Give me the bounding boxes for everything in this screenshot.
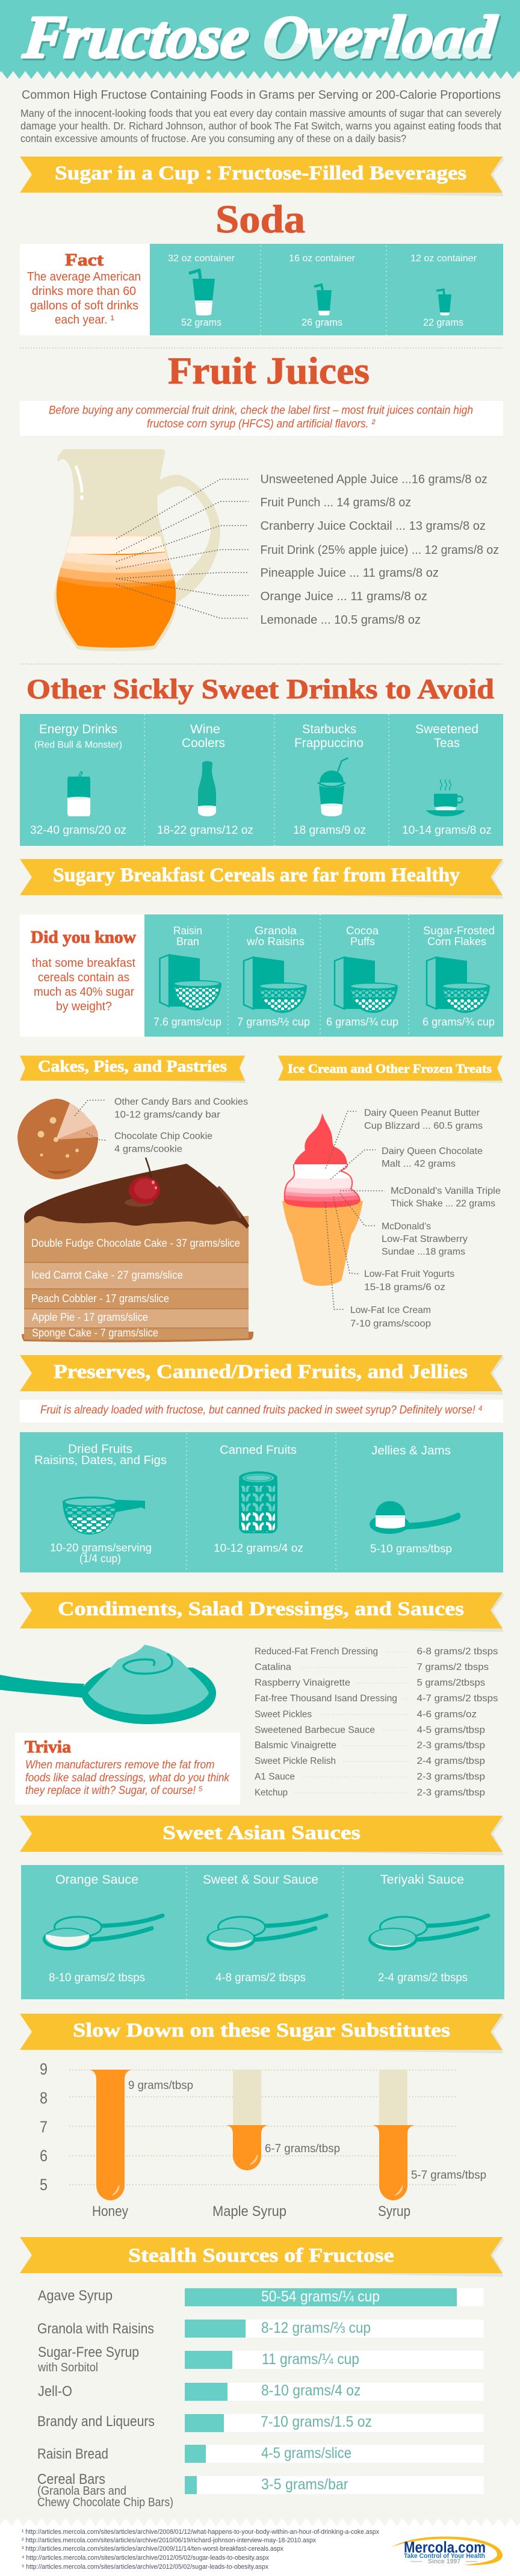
leader lines: juices [116, 479, 249, 618]
tube: maple syrup: Maple Syrup [212, 2203, 286, 2220]
cookie labels: Chocolate Chip Cookie [114, 1131, 212, 1141]
tube: syrup: 5-7 grams/tbsp [411, 2169, 486, 2182]
cereal column: raisin bran: Raisin [173, 925, 202, 937]
tube: honey: 9 grams/tbsp [128, 2079, 193, 2092]
fact callout: gallons of soft drinks [30, 299, 138, 312]
wine coolers column [157, 722, 253, 837]
ice cream labels: Cup Blizzard ... 60.5 grams [364, 1121, 483, 1131]
cookie labels: Other Candy Bars and Cookies [114, 1097, 248, 1107]
cereal column: frosted flakes [422, 925, 495, 1028]
bar: sugar-free syrup: Sugar-Free Syrup [38, 2344, 139, 2360]
subtitle: Common High Fructose Containing Foods in Grams per Serving or 200-Calorie Proportions [22, 88, 501, 102]
fact callout [27, 250, 141, 326]
cereal column: frosted flakes: Sugar-Frosted [423, 925, 495, 937]
fact callout: each year. ¹ [55, 313, 114, 326]
banner: sugar substitutes: Slow Down on these Sugar Substitutes [73, 2020, 450, 2041]
fact callout: drinks more than 60 [32, 285, 136, 298]
banner: sugar in a cup [20, 157, 504, 196]
bar: granola [37, 2320, 484, 2338]
bar: cereal bars: (Granola Bars and [37, 2484, 126, 2498]
references: ³ http://articles.mercola.com/sites/articles/archive/2009/11/14/ten-worst-breakfast-cereals.aspx [22, 2545, 283, 2553]
icon: big spoon with dressing [0, 1645, 216, 1724]
bar: raisin bread: 4-5 grams/slice [261, 2445, 351, 2462]
intro paragraph: contain excessive amounts of fructose. Are you consuming any of these on a daily basis? [20, 132, 406, 144]
bar: jell-o: Jell-O [38, 2383, 72, 2400]
cherry [125, 1158, 160, 1206]
banner: ice cream [278, 1056, 503, 1083]
cereal column: granola: Granola [255, 925, 297, 937]
ice cream labels: Dairy Queen Peanut Butter [364, 1108, 480, 1119]
juice list: Orange Juice ... 11 grams/8 oz [260, 590, 427, 603]
fact callout: The average American [27, 270, 141, 284]
title: Fructose Overload [20, 4, 500, 70]
top swirl [294, 1113, 347, 1165]
jellies and jams column: Jellies & Jams [371, 1444, 451, 1457]
intro paragraph [20, 107, 501, 144]
plate [22, 1332, 253, 1342]
cake labels: Iced Carrot Cake - 27 grams/slice [31, 1269, 183, 1281]
condiments table: 6-8 grams/2 tbsps [416, 1646, 498, 1657]
did you know callout [31, 928, 136, 1013]
ice cream labels: Dairy Queen Chocolate [382, 1146, 483, 1156]
condiments table: 4-5 grams/tbsp [416, 1725, 485, 1736]
cake layers [24, 1216, 249, 1340]
juice list: Pineapple Juice ... 11 grams/8 oz [260, 566, 439, 580]
sweetened teas column: Teas [434, 736, 460, 750]
did you know callout: Did you know [31, 928, 136, 947]
frappuccino column [293, 722, 366, 837]
bar: brandy: 7-10 grams/1.5 oz [261, 2413, 372, 2430]
cake labels: Sponge Cake - 7 grams/slice [32, 1327, 158, 1339]
soda column 32 oz [168, 253, 235, 328]
references: ⁴ http://articles.mercola.com/sites/articles/archive/2012/05/02/sugar-leads-to-obesity.aspx [22, 2554, 269, 2562]
condiments table: Balsmic Vinaigrette [255, 1740, 336, 1751]
bar: cereal bars: 3-5 grams/bar [261, 2476, 348, 2493]
panel: asian sauces [21, 1865, 504, 1999]
frappuccino column: Starbucks [302, 722, 356, 736]
tube: maple syrup [212, 2070, 340, 2220]
bar: agave: Agave Syrup [38, 2288, 113, 2304]
title: Fructose Overload [22, 5, 501, 72]
logo: mercola: Since 1997 [428, 2558, 460, 2565]
condiments table: 2-3 grams/tbsp [416, 1788, 485, 1798]
logo: mercola: Mercola.com [404, 2538, 486, 2556]
banner: cereals [20, 859, 504, 899]
jellies and jams column [370, 1444, 460, 1554]
dried fruits column: 10-20 grams/serving [50, 1542, 152, 1554]
juice list: Cranberry Juice Cocktail ... 13 grams/8 oz [260, 520, 486, 533]
condiments table: Reduced-Fat French Dressing [255, 1646, 378, 1657]
trivia callout: Trivia [25, 1737, 72, 1757]
bar: agave [38, 2288, 484, 2306]
references: ² http://articles.mercola.com/sites/articles/archive/2010/06/19/richard-johnson-interview-may-18-2010.aspx [22, 2537, 316, 2544]
banner: asian sauces [20, 1816, 504, 1855]
did you know callout: cereals contain as [38, 971, 129, 984]
banner: cereals: Sugary Breakfast Cereals are far from Healthy [53, 864, 460, 886]
juice list: Fruit Punch ... 14 grams/8 oz [260, 496, 411, 509]
footer band [0, 2518, 520, 2576]
condiments table: 2-3 grams/tbsp [416, 1740, 485, 1751]
energy drinks column [30, 722, 126, 837]
cereal column: cocoa puffs [326, 925, 398, 1028]
banner: stealth sources: Stealth Sources of Fructose [128, 2245, 394, 2267]
juice layers [54, 536, 181, 651]
bar chart: stealth sources [37, 2288, 484, 2509]
soda column 16 oz: 16 oz container [289, 253, 356, 264]
banner: cakes: Cakes, Pies, and Pastries [38, 1057, 227, 1075]
ice cream labels [350, 1108, 501, 1329]
ice cream labels: Malt ... 42 grams [382, 1159, 456, 1169]
axis labels: 5 [40, 2176, 48, 2194]
jellies and jams column: 5-10 grams/tbsp [370, 1542, 452, 1554]
callout: canned fruit [20, 1400, 503, 1423]
bar: cereal bars: Cereal Bars [37, 2471, 105, 2488]
juice list [260, 473, 499, 627]
cake labels [31, 1237, 240, 1339]
orange sauce column [43, 1873, 162, 1984]
soda column 12 oz [410, 253, 477, 328]
cereal column: granola: 7 grams/½ cup [237, 1016, 310, 1028]
bar: jell-o [38, 2382, 484, 2401]
bar: jell-o: 8-10 grams/4 oz [261, 2382, 361, 2399]
bar: sugar-free syrup: 11 grams/¼ cup [262, 2351, 359, 2368]
leader lines: cookie [75, 1100, 106, 1140]
energy drinks column: 32-40 grams/20 oz [30, 824, 126, 837]
cereal column: raisin bran [153, 925, 221, 1028]
panel: cereals [20, 914, 503, 1037]
banner: stealth sources [20, 2237, 504, 2277]
heading: fruit juices: Fruit Juices [168, 349, 370, 392]
bar: sugar-free syrup: with Sorbitol [37, 2361, 98, 2374]
soda column 16 oz: 26 grams [302, 317, 342, 328]
canned fruits column [214, 1444, 303, 1554]
cake illustration [22, 1158, 253, 1342]
pitcher illustration [54, 449, 220, 651]
intro paragraph: damage your health. Dr. Richard Johnson, author of book The Fat Switch, warns you against eating foods that [20, 120, 501, 132]
cereal column: raisin bran: 7.6 grams/cup [153, 1016, 221, 1028]
ice cream labels: Thick Shake ... 22 grams [391, 1199, 495, 1209]
cookie labels: 10-12 grams/candy bar [114, 1110, 220, 1120]
juice list: Unsweetened Apple Juice ...16 grams/8 oz [260, 473, 488, 486]
heading: soda: Soda [215, 197, 305, 241]
orange sauce column: 8-10 grams/2 tbsps [49, 1972, 145, 1984]
cake labels: Peach Cobbler - 17 grams/slice [31, 1293, 169, 1305]
ice cream labels: Low-Fat Strawberry [382, 1234, 468, 1244]
ice cream labels: Low-Fat Ice Cream [350, 1305, 431, 1315]
banner: asian sauces: Sweet Asian Sauces [162, 1822, 361, 1844]
banner: sugar substitutes [20, 2014, 504, 2053]
banner: cakes [20, 1056, 246, 1083]
cereal column: frosted flakes: Corn Flakes [427, 936, 486, 948]
frosting [24, 1164, 249, 1229]
bar: brandy: Brandy and Liqueurs [37, 2413, 155, 2430]
condiments table: Sweetened Barbecue Sauce [255, 1725, 375, 1736]
orange sauce column: Orange Sauce [55, 1873, 138, 1887]
sweetened teas column [402, 722, 492, 837]
bar: raisin bread: Raisin Bread [37, 2446, 108, 2462]
tube: syrup [373, 2070, 486, 2220]
cereal column: granola [237, 925, 310, 1028]
bar: granola: 8-12 grams/⅔ cup [261, 2320, 371, 2336]
cereal column: cocoa puffs: 6 grams/¾ cup [326, 1016, 398, 1028]
bar: brandy [37, 2413, 484, 2432]
heading: other drinks: Other Sickly Sweet Drinks to Avoid [26, 674, 494, 705]
sweetened teas column: 10-14 grams/8 oz [402, 824, 492, 837]
condiments table: 7 grams/2 tbsps [416, 1662, 489, 1672]
fact callout: Fact [65, 250, 104, 270]
tube: honey [90, 2070, 193, 2220]
cake labels: Double Fudge Chocolate Cake - 37 grams/slice [31, 1237, 240, 1249]
teriyaki column: 2-4 grams/2 tbsps [378, 1972, 468, 1984]
axis labels: 8 [40, 2089, 48, 2107]
cone [282, 1201, 363, 1286]
callout: canned fruit: Fruit is already loaded with fructose, but canned fruits packed in sweet syrup? Definitely worse! ⁴ [40, 1404, 483, 1417]
soda column 16 oz [289, 253, 356, 328]
ice cream labels: 7-10 grams/scoop [350, 1318, 431, 1329]
condiments table: 4-7 grams/2 tbsps [416, 1693, 498, 1704]
axis labels [40, 2060, 48, 2194]
sweet and sour column: 4-8 grams/2 tbsps [215, 1972, 306, 1984]
bar: cereal bars [37, 2471, 484, 2509]
references [22, 2528, 379, 2571]
tube: syrup: Syrup [378, 2203, 410, 2220]
wine coolers column: Coolers [182, 736, 225, 750]
callout: fruit juice label: Before buying any commercial fruit drink, check the label first – most fruit juices contain high [49, 405, 473, 417]
condiments table: 5 grams/2tbsps [416, 1678, 485, 1688]
cake labels: Apple Pie - 17 grams/slice [32, 1311, 148, 1323]
cereal column: granola: w/o Raisins [246, 936, 305, 948]
bar: agave: 50-54 grams/¼ cup [261, 2288, 380, 2305]
dried fruits column: Dried Fruits [68, 1443, 132, 1456]
bar: granola: Granola with Raisins [37, 2321, 154, 2337]
ice cream cone illustration [282, 1113, 363, 1286]
condiments table: 4-6 grams/oz [416, 1710, 477, 1719]
banner: preserves [20, 1355, 504, 1395]
soda column 12 oz: 22 grams [423, 317, 463, 328]
callout: fruit juice label: fructose corn syrup (HFCS) and artificial flavors. ² [147, 418, 376, 430]
did you know callout: by weight? [56, 1000, 112, 1013]
teriyaki column: Teriyaki Sauce [380, 1873, 464, 1887]
references: ¹ http://articles.mercola.com/sites/articles/archive/2008/01/12/what-happens-to-your-body-within-an-hour-of-drinking-a-coke.aspx [22, 2528, 379, 2536]
condiments table: Catalina [255, 1662, 291, 1672]
wine coolers column: 18-22 grams/12 oz [157, 824, 253, 837]
callout: fruit juice label [20, 401, 503, 436]
soda column 12 oz: 12 oz container [410, 253, 477, 264]
soda column 32 oz: 52 grams [181, 317, 221, 328]
condiments table: Raspberry Vinaigrette [255, 1678, 350, 1688]
condiments table: Fat-free Thousand Isand Dressing [255, 1693, 397, 1704]
tube: honey: Honey [92, 2203, 128, 2220]
ice cream labels: McDonald's [382, 1221, 431, 1232]
cookie illustration [17, 1099, 98, 1179]
sweet and sour column [203, 1873, 326, 1984]
banner: condiments: Condiments, Salad Dressings, and Sauces [58, 1598, 464, 1620]
bar: sugar-free syrup [37, 2344, 484, 2374]
did you know callout: that some breakfast [32, 957, 135, 970]
cereal column: cocoa puffs: Cocoa [346, 925, 379, 937]
condiments table: 2-3 grams/tbsp [416, 1772, 485, 1782]
banner: preserves: Preserves, Canned/Dried Fruits, and Jellies [54, 1361, 468, 1383]
references: ⁵ http://articles.mercola.com/sites/articles/archive/2012/05/02/sugar-leads-to-obesity.aspx [22, 2563, 268, 2571]
energy drinks column: (Red Bull & Monster) [34, 740, 122, 750]
dried fruits column: (1/4 cup) [79, 1553, 121, 1565]
soda column 32 oz: 32 oz container [168, 253, 235, 264]
ice cream labels: Sundae ...18 grams [382, 1247, 465, 1257]
sweetened teas column: Sweetened [415, 722, 478, 736]
header band [0, 0, 520, 79]
juice list: Lemonade ... 10.5 grams/8 oz [260, 613, 421, 627]
ice cream labels: McDonald's Vanilla Triple [391, 1186, 501, 1196]
ice cream labels: Low-Fat Fruit Yogurts [364, 1269, 454, 1279]
cookie labels [114, 1097, 248, 1155]
logo: mercola [391, 2536, 503, 2565]
cereal column: cocoa puffs: Puffs [350, 936, 375, 948]
panel: other drinks [20, 714, 503, 846]
axis labels: 6 [40, 2147, 48, 2165]
trivia callout: they replace it with? Sugar, of course! ⁵ [25, 1784, 203, 1797]
condiments table: Sweet Pickles [255, 1710, 312, 1719]
leader lines: ice cream [325, 1111, 385, 1309]
dried fruits column: Raisins, Dates, and Figs [34, 1454, 167, 1467]
bar: raisin bread [37, 2445, 484, 2463]
panel: preserves [20, 1432, 503, 1572]
cereal column: raisin bran: Bran [176, 936, 199, 948]
logo: mercola: Take Control of Your Health [404, 2553, 485, 2560]
axis labels: 9 [40, 2060, 48, 2078]
wine coolers column: Wine [190, 722, 220, 736]
condiments table: Sweet Pickle Relish [255, 1756, 336, 1766]
condiments table [255, 1646, 498, 1798]
title: Fructose Overload [20, 4, 500, 70]
banner: condiments [20, 1592, 504, 1632]
bar: cereal bars: Chewy Chocolate Chip Bars) [37, 2496, 173, 2509]
condiments table: A1 Sauce [255, 1772, 295, 1782]
axis labels: 7 [40, 2118, 48, 2136]
tube: maple syrup: 6-7 grams/tbsp [265, 2143, 340, 2155]
banner: sugar in a cup: Sugar in a Cup : Fructose-Filled Beverages [55, 163, 466, 184]
did you know callout: much as 40% sugar [34, 985, 134, 999]
trivia callout: foods like salad dressings, what do you think [25, 1772, 230, 1784]
ice cream labels: 15-18 grams/6 oz [364, 1282, 445, 1293]
chart: sugar substitutes [40, 2060, 486, 2220]
panel: soda [20, 244, 503, 335]
canned fruits column: Canned Fruits [220, 1444, 297, 1457]
energy drinks column: Energy Drinks [39, 722, 117, 736]
canned fruits column: 10-12 grams/4 oz [214, 1542, 303, 1554]
cookie labels: 4 grams/cookie [114, 1144, 182, 1155]
frappuccino column: 18 grams/9 oz [293, 824, 366, 837]
frappuccino column: Frappuccino [294, 736, 364, 750]
banner: ice cream: Ice Cream and Other Frozen Treats [288, 1061, 492, 1076]
sweet and sour column: Sweet & Sour Sauce [203, 1873, 318, 1887]
trivia callout [15, 1733, 240, 1805]
scoop layers [285, 1164, 360, 1208]
condiments table: 2-4 grams/tbsp [416, 1756, 485, 1766]
cereal column: frosted flakes: 6 grams/¾ cup [422, 1016, 495, 1028]
dried fruits column [34, 1443, 167, 1565]
juice list: Fruit Drink (25% apple juice) ... 12 grams/8 oz [260, 544, 499, 557]
teriyaki column [368, 1873, 488, 1984]
trivia callout: When manufacturers remove the fat from [25, 1759, 214, 1771]
title [20, 14, 501, 61]
condiments table: Ketchup [255, 1788, 288, 1798]
